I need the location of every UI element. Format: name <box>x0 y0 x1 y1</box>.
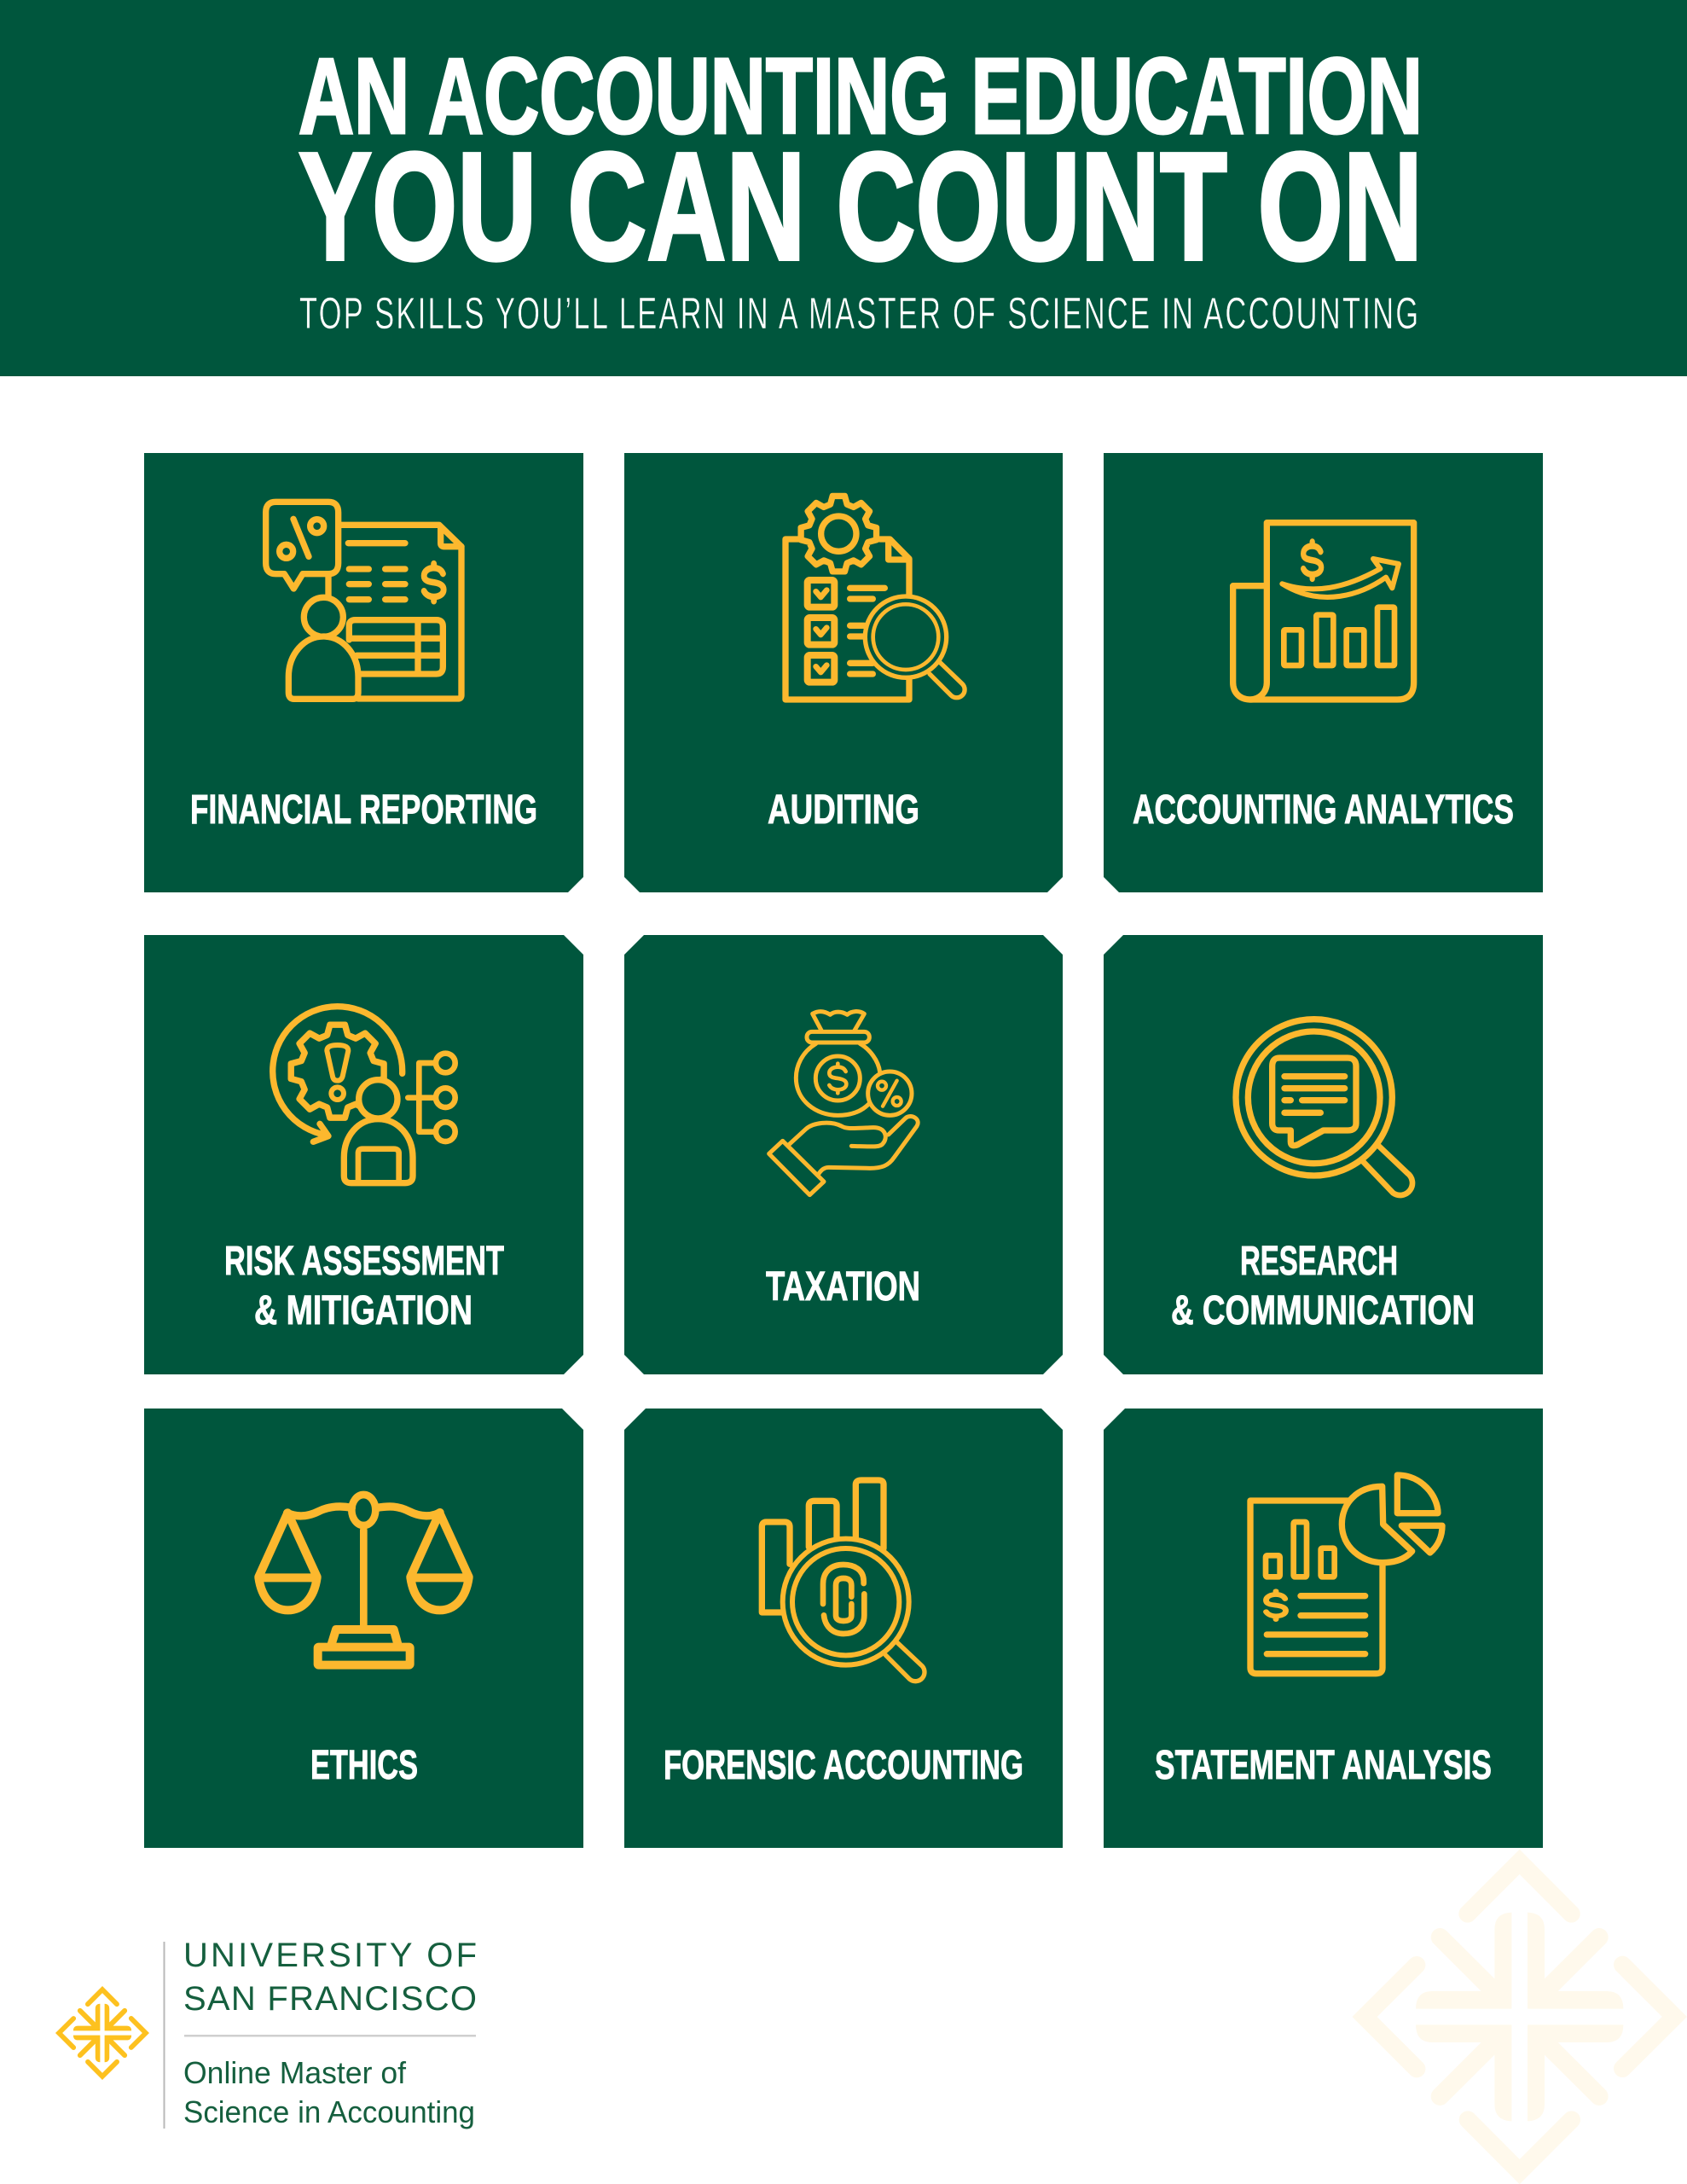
label: statement analysis: STATEMENT ANALYSIS <box>1155 1743 1492 1788</box>
panel: research and communication <box>1104 935 1543 1374</box>
label: research and communication <box>1171 1239 1475 1333</box>
icon: emblem <box>59 1989 146 2077</box>
icon: risk gear with person <box>273 1007 455 1183</box>
panel: accounting analytics <box>1104 453 1543 892</box>
icon: money bag on hand <box>769 1012 918 1195</box>
panel: forensic accounting <box>624 1409 1063 1848</box>
label: risk assessment and mitigation: & MITIGATION <box>254 1288 472 1333</box>
icon: statement with pie chart <box>1250 1475 1442 1674</box>
label: research and communication: RESEARCH <box>1240 1239 1398 1284</box>
label: research and communication: & COMMUNICATION <box>1171 1288 1475 1333</box>
watermark: university emblem <box>1365 1862 1674 2172</box>
subtitle: TOP SKILLS YOU’LL LEARN IN A MASTER OF SCIENCE IN ACCOUNTING <box>299 289 1418 339</box>
icon: magnifier with fingerprint and bars <box>762 1480 925 1682</box>
university name <box>183 1937 477 2018</box>
program name: Online Master of <box>183 2055 407 2090</box>
icon: financial report with person <box>266 502 461 699</box>
university name: SAN FRANCISCO <box>183 1980 477 2018</box>
program name <box>183 2055 475 2129</box>
label: taxation: TAXATION <box>766 1264 920 1310</box>
header banner <box>0 0 1687 376</box>
icon: balance scale <box>258 1495 469 1665</box>
label: risk assessment and mitigation <box>224 1239 504 1333</box>
icon: magnifier with speech bubble <box>1236 1019 1412 1195</box>
panel: risk assessment and mitigation <box>144 935 583 1374</box>
panel: financial reporting <box>144 453 583 892</box>
label: auditing: AUDITING <box>768 787 919 833</box>
logo: university of san francisco <box>59 1937 477 2129</box>
label: forensic accounting: FORENSIC ACCOUNTING <box>664 1743 1023 1788</box>
panel: taxation <box>624 935 1063 1374</box>
label: financial reporting: FINANCIAL REPORTING <box>190 787 537 833</box>
label: accounting analytics: ACCOUNTING ANALYTICS <box>1133 787 1514 833</box>
label: risk assessment and mitigation: RISK ASSESSMENT <box>224 1239 504 1284</box>
label: ethics: ETHICS <box>310 1743 418 1788</box>
panel: ethics <box>144 1409 583 1848</box>
program name: Science in Accounting <box>183 2094 475 2129</box>
panel: statement analysis <box>1104 1409 1543 1848</box>
icon: audit checklist with gear and magnifier <box>786 496 965 700</box>
panel: auditing <box>624 453 1063 892</box>
logo divider <box>164 1942 165 2129</box>
university name: UNIVERSITY OF <box>183 1937 477 1974</box>
icon: analytics scroll chart <box>1233 523 1414 700</box>
